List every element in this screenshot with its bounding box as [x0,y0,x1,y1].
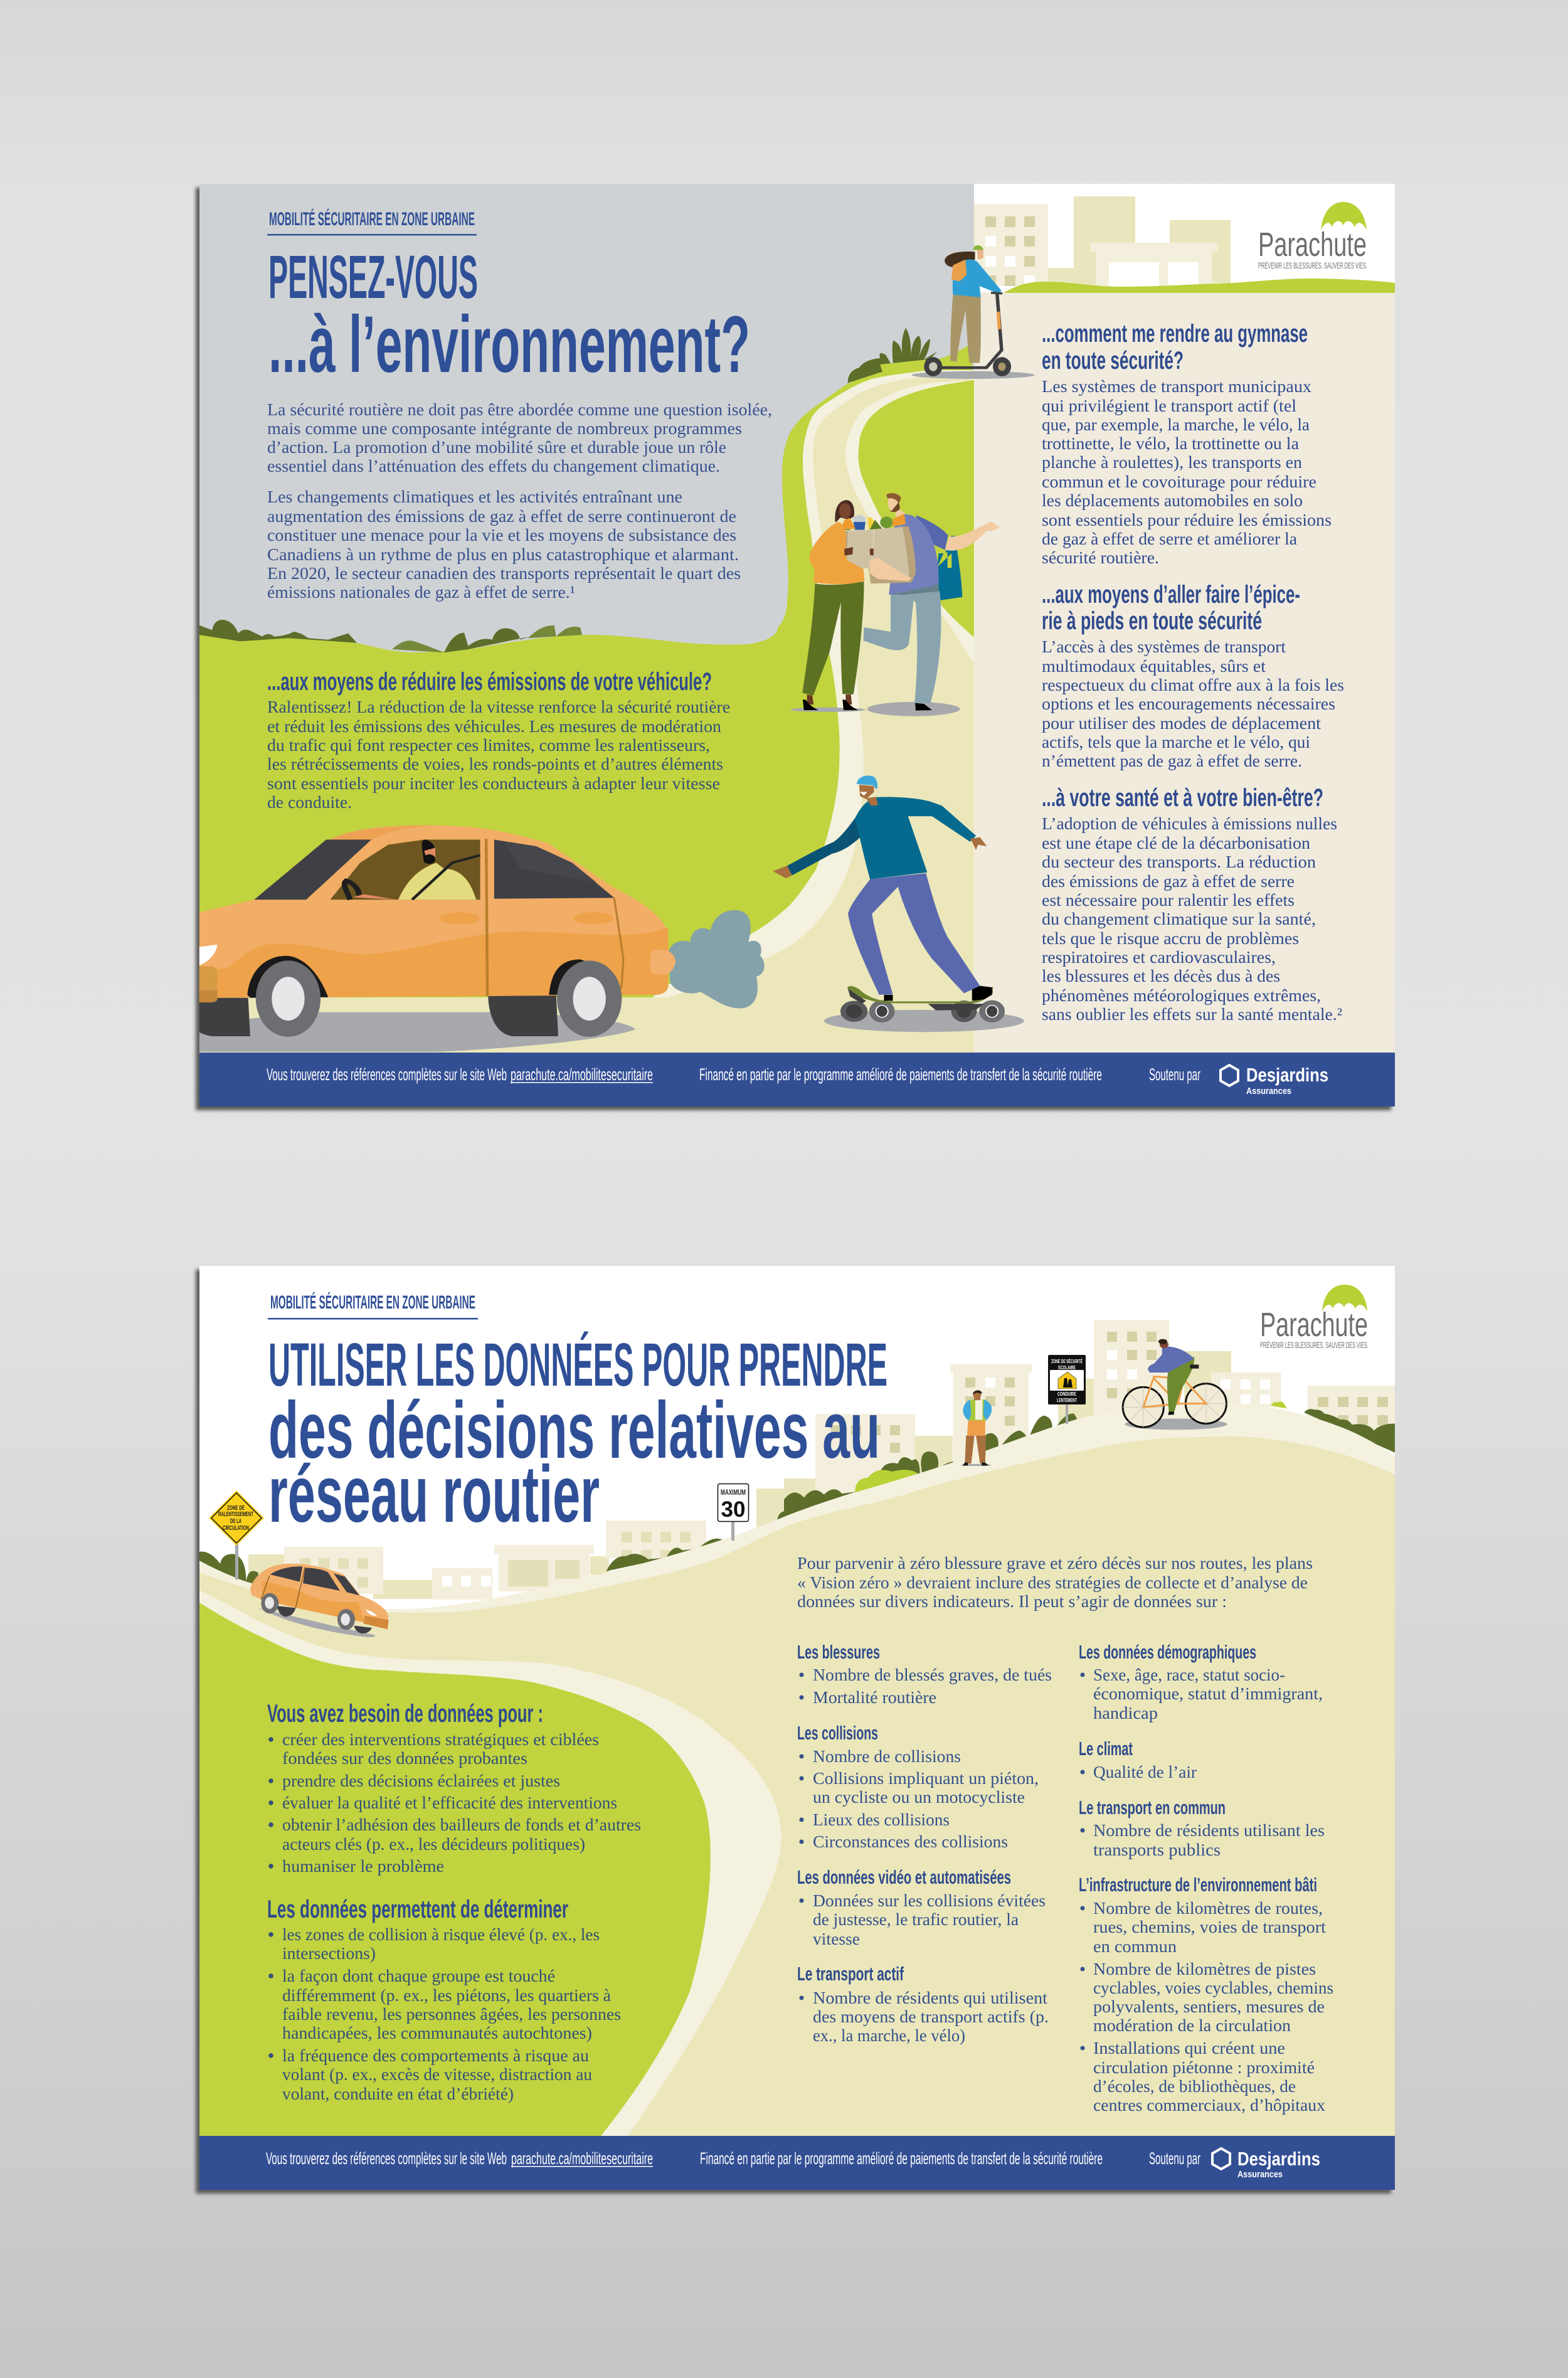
list: data indicators, right column: cyclables, voies cyclables, chemins [1093,1978,1333,1997]
list: data indicators, left column: Les collisions [797,1722,878,1744]
list: data indicators, right column: Le transport en commun [1079,1797,1226,1818]
text block: introduction: d’action. La promotion d’une mobilité sûre et durable joue un rôle [267,437,726,457]
text block: intro Vision zéro [797,1553,1313,1611]
list: data indicators, left column: Collisions impliquant un piéton, [813,1768,1039,1788]
list: data indicators, right column: Sexe, âge, race, statut socio- [1093,1665,1285,1684]
text block: gymnase: de gaz à effet de serre et améliorer la [1042,529,1297,548]
text block: vehicle emissions: de conduite. [267,792,352,812]
text block: épicerie: L’accès à des systèmes de transport [1042,637,1286,656]
text block: gymnase: Les systèmes de transport municipaux [1042,376,1311,396]
list: data indicators, right column: Nombre de kilomètres de routes, [1093,1898,1323,1918]
list: what data can determine: les zones de collision à risque élevé (p. ex., les [282,1924,600,1944]
text block: gymnase: en toute sécurité? [1042,347,1184,374]
list: what data can determine: la fréquence des comportements à risque au [282,2046,589,2065]
list: data indicators, left column: Les données vidéo et automatisées [797,1866,1011,1888]
text block: introduction: mais comme une composante intégrante de nombreux programmes [267,418,742,438]
list: data indicators, right column: d’écoles, de bibliothèques, de [1093,2076,1296,2096]
list: data indicators, left column: Nombre de blessés graves, de tués [813,1665,1052,1684]
text block: épicerie [1042,581,1344,770]
illustration: couple with groceries [790,493,1000,716]
list: data indicators, right column: économique, statut d’immigrant, [1093,1684,1323,1703]
text block: gymnase: sont essentiels pour réduire les émissions [1042,510,1332,529]
text block: gymnase: que, par exemple, la marche, le vélo, la [1042,415,1310,434]
list: data indicators, left column: Données sur les collisions évitées [813,1891,1046,1910]
list: why data is needed: fondées sur des données probantes [282,1748,527,1768]
illustration: small orange car [250,1564,389,1637]
text block: vehicle emissions: ...aux moyens de réduire les émissions de votre véhicule? [267,668,712,696]
footer band: Soutenu par [1149,1065,1200,1084]
text block: santé et bien-être: du changement climatique sur la santé, [1042,909,1316,928]
text block: intro Vision zéro: Pour parvenir à zéro blessure grave et zéro décès sur nos routes, les plans [797,1553,1313,1573]
list: data indicators, left column: Nombre de résidents qui utilisent [813,1988,1047,2007]
title [268,1330,887,1539]
title: réseau routier [268,1450,600,1539]
icon: school zone sign: CONDUIRE [1057,1391,1076,1397]
illustration: cyclist [1123,1339,1227,1430]
text block: épicerie: multimodaux équitables, sûrs et [1042,656,1266,676]
list: what data can determine [267,1896,621,2103]
list: data indicators, right column: Le climat [1079,1738,1133,1760]
list: data indicators, left column: ex., la marche, le vélo) [813,2025,965,2045]
title: PENSEZ-VOUS [268,243,478,311]
text block: introduction: essentiel dans l’atténuation des effets du changement climatique. [267,456,720,475]
list: data indicators, right column: circulation piétonne : proximité [1093,2057,1315,2077]
list: data indicators, right column: rues, chemins, voies de transport [1093,1917,1326,1936]
illustration: skateboarder [773,776,1024,1032]
footer band: Desjardins [1246,1064,1328,1086]
text block: vehicle emissions: Ralentissez! La réduction de la vitesse renforce la sécurité routière [267,697,730,716]
text block: santé et bien-être [1042,784,1342,1024]
footer band: Assurances [1246,1086,1291,1096]
text block: épicerie: ...aux moyens d’aller faire l’épice- [1042,581,1300,608]
list: data indicators, right column [1079,1641,1333,2115]
list: data indicators, right column: en commun [1093,1936,1177,1956]
illustration: lime wave strip [1004,279,1395,293]
text block: santé et bien-être: respiratoires et cardiovasculaires, [1042,947,1276,967]
icon: slow zone sign: DE LA [230,1518,241,1525]
text block: introduction [267,400,772,602]
text block: gymnase [1042,320,1332,567]
text block: introduction: émissions nationales de gaz à effet de serre.¹ [267,582,575,602]
footer band: Desjardins [1237,2148,1320,2170]
icon: school zone sign [1048,1355,1086,1424]
list: data indicators, right column: L’infrastructure de l’environnement bâti [1079,1874,1317,1896]
text block: santé et bien-être: L’adoption de véhicules à émissions nulles [1042,814,1337,833]
illustration: city buildings, top right [974,196,1231,287]
text block: santé et bien-être: du secteur des transports. La réduction [1042,852,1316,871]
list: what data can determine: volant (p. ex., excès de vitesse, distraction au [282,2064,592,2084]
list: data indicators, right column: Les données démographiques [1079,1641,1256,1663]
text block: vehicle emissions [267,668,730,812]
footer band: parachute.ca/mobilitesecuritaire [511,2149,653,2168]
text block: vehicle emissions: sont essentiels pour inciter les conducteurs à adapter leur vitesse [267,773,720,793]
list: why data is needed: acteurs clés (p. ex., les décideurs politiques) [282,1834,585,1854]
logo: Parachute [1258,202,1367,270]
illustration: roadside bushes [199,1401,1395,1584]
text block: épicerie: n’émettent pas de gaz à effet de serre. [1042,751,1302,770]
text block: introduction: La sécurité routière ne doit pas être abordée comme une question isolée, [267,400,772,419]
list: data indicators, right column: modération de la circulation [1093,2015,1291,2035]
footer band: Assurances [1237,2169,1283,2180]
icon: slow zone sign [209,1490,264,1579]
text block: gymnase: planche à roulettes), les transports en [1042,452,1302,472]
list: data indicators, right column: Nombre de kilomètres de pistes [1093,1959,1316,1978]
list: data indicators, right column: Installations qui créent une [1093,2038,1285,2057]
icon: school zone sign: SCOLAIRE [1058,1364,1076,1371]
title: ...à l’environnement? [268,300,750,390]
logo: Parachute: Parachute [1258,226,1367,263]
icon: school zone sign: ZONE DE SÉCURITÉ [1051,1358,1083,1364]
list: why data is needed: humaniser le problème [282,1856,444,1876]
text block: épicerie: respectueux du climat offre aux à la fois les [1042,675,1344,694]
list: why data is needed: obtenir l’adhésion des bailleurs de fonds et d’autres [282,1815,641,1834]
icon: slow zone sign: ZONE DE [227,1505,245,1512]
text block: santé et bien-être: sans oublier les effets sur la santé mentale.² [1042,1004,1342,1024]
panel: pensez-vous à l'environnement [199,184,1395,1107]
list: data indicators, left column: un cycliste ou un motocycliste [813,1787,1025,1807]
list: what data can determine: faible revenu, les personnes âgées, les personnes [282,2004,621,2024]
text block: gymnase: trottinette, le vélo, la trottinette ou la [1042,433,1299,453]
list: why data is needed [267,1700,641,1876]
title: UTILISER LES DONNÉES POUR PRENDRE [268,1330,887,1399]
text block: épicerie: options et les encouragements nécessaires [1042,694,1335,713]
illustration: bushes near scooter [848,328,937,383]
list: data indicators, left column: Mortalité routière [813,1687,936,1707]
list: what data can determine: handicapées, les communautés autochtones) [282,2023,592,2042]
text block: introduction: Canadiens à un rythme de plus en plus catastrophique et alarmant. [267,544,739,564]
list: data indicators, left column [797,1641,1052,2045]
list: data indicators, right column: transports publics [1093,1840,1221,1859]
list: data indicators, left column: Lieux des collisions [813,1810,950,1829]
list: what data can determine: différemment (p. ex., les piétons, les quartiers à [282,1985,611,2005]
icon: maximum 30 sign [718,1484,749,1541]
list: what data can determine: volant, conduite en état d’ébriété) [282,2084,514,2103]
list: data indicators, left column: Le transport actif [797,1963,904,1985]
list: why data is needed: prendre des décisions éclairées et justes [282,1771,560,1790]
text block: intro Vision zéro: données sur divers indicateurs. Il peut s’agir de données sur : [797,1591,1227,1611]
list: why data is needed: créer des interventions stratégiques et ciblées [282,1729,599,1749]
text block: gymnase: qui privilégient le transport actif (tel [1042,396,1296,415]
list: data indicators, left column: Nombre de collisions [813,1746,961,1766]
text block: intro Vision zéro: « Vision zéro » devraient inclure des stratégies de collecte et d’analyse de [797,1573,1308,1592]
list: data indicators, right column: polyvalents, sentiers, mesures de [1093,1997,1325,2016]
text block: épicerie: pour utiliser des modes de déplacement [1042,713,1321,733]
icon: slow zone sign: RALENTISSEMENT [218,1511,253,1518]
illustration: city buildings [248,1320,1395,1600]
list: why data is needed: Vous avez besoin de données pour : [267,1700,543,1728]
text block: épicerie: rie à pieds en toute sécurité [1042,607,1262,635]
footer band: Financé en partie par le programme amélioré de paiements de transfert de la sécurité routière [700,2149,1103,2168]
text block: santé et bien-être: les blessures et les décès dus à des [1042,966,1280,985]
list: data indicators, right column: centres commerciaux, d’hôpitaux [1093,2095,1325,2115]
text block: gymnase: les déplacements automobiles en solo [1042,491,1303,510]
logo: Parachute: PRÉVENIR LES BLESSURES. SAUVER DES VIES. [1260,1340,1369,1350]
list: data indicators, left column: de justesse, le trafic routier, la [813,1909,1019,1929]
text block: vehicle emissions: du trafic qui font respecter ces limites, comme les ralentisseurs, [267,735,710,755]
list: data indicators, right column: Nombre de résidents utilisant les [1093,1820,1325,1840]
text block: introduction: Les changements climatiques et les activités entraînant une [267,487,682,506]
text block: santé et bien-être: est une étape clé de la décarbonisation [1042,833,1310,852]
logo: Parachute: Parachute [1260,1306,1368,1344]
list: what data can determine: la façon dont chaque groupe est touché [282,1966,555,1985]
text block: santé et bien-être: tels que le risque accru de problèmes [1042,928,1299,948]
footer band: Soutenu par [1149,2149,1200,2168]
logo: Parachute [1260,1285,1369,1350]
illustration: road [199,370,974,1053]
heading: series label: MOBILITÉ SÉCURITAIRE EN ZONE URBAINE [269,208,475,230]
list: what data can determine: Les données permettent de déterminer [267,1896,568,1923]
list: what data can determine: intersections) [282,1943,376,1963]
heading: series label: MOBILITÉ SÉCURITAIRE EN ZONE URBAINE [270,1292,475,1313]
illustration: hill bushes [199,620,582,652]
list: why data is needed: évaluer la qualité et l’efficacité des interventions [282,1793,617,1812]
illustration: hills and road [199,1403,1395,2136]
text block: épicerie: actifs, tels que la marche et le vélo, qui [1042,732,1310,751]
footer band: Financé en partie par le programme amélioré de paiements de transfert de la sécurité routière [699,1065,1102,1084]
text block: introduction: En 2020, le secteur canadien des transports représentait le quart des [267,563,741,583]
text block: introduction: constituer une menace pour la vie et les moyens de subsistance des [267,525,736,544]
footer band: Vous trouverez des références complètes sur le site Web [267,1065,507,1084]
text block: gymnase: ...comment me rendre au gymnase [1042,320,1308,348]
text block: gymnase: sécurité routière. [1042,548,1159,567]
text block: vehicle emissions: et réduit les émissions des véhicules. Les mesures de modération [267,716,721,736]
icon: maximum 30 sign: 30 [721,1497,745,1522]
list: data indicators, right column: handicap [1093,1703,1158,1722]
illustration: exhaust cloud [668,910,765,1008]
title: des décisions relatives au [268,1386,880,1475]
icon: slow zone sign: CIRCULATION [223,1525,249,1532]
footer band [199,1053,1395,1107]
text block: introduction: augmentation des émissions de gaz à effet de serre continueront de [267,506,736,526]
icon: school zone sign: LENTEMENT [1057,1397,1077,1403]
text block: santé et bien-être: phénomènes météorologiques extrêmes, [1042,985,1321,1005]
list: data indicators, left column: Les blessures [797,1641,880,1663]
text block: gymnase: commun et le covoiturage pour réduire [1042,472,1316,491]
list: data indicators, left column: vitesse [813,1929,860,1948]
text block: santé et bien-être: des émissions de gaz à effet de serre [1042,871,1295,891]
list: data indicators, left column: Circonstances des collisions [813,1832,1008,1851]
logo: Parachute: PRÉVENIR LES BLESSURES. SAUVER DES VIES. [1258,260,1367,270]
illustration: orange car with driver [199,825,675,1052]
panel: utiliser les données [199,1266,1395,2190]
footer band: parachute.ca/mobilitesecuritaire [511,1065,653,1084]
title [268,243,750,390]
illustration: scooter rider [911,245,1035,379]
text block: vehicle emissions: les rétrécissements de voies, les ronds-points et d’autres éléments [267,754,723,773]
list: data indicators, right column: Qualité de l’air [1093,1762,1197,1781]
list: data indicators, left column: des moyens de transport actifs (p. [813,2007,1049,2026]
footer band: Vous trouverez des références complètes sur le site Web [266,2149,507,2168]
footer band [199,2136,1395,2190]
illustration: standing pedestrian [961,1390,992,1466]
text block: santé et bien-être: ...à votre santé et à votre bien-être? [1042,784,1323,812]
illustration: lime hill [199,344,974,1053]
icon: maximum 30 sign: MAXIMUM [721,1488,746,1497]
text block: santé et bien-être: est nécessaire pour ralentir les effets [1042,890,1295,910]
